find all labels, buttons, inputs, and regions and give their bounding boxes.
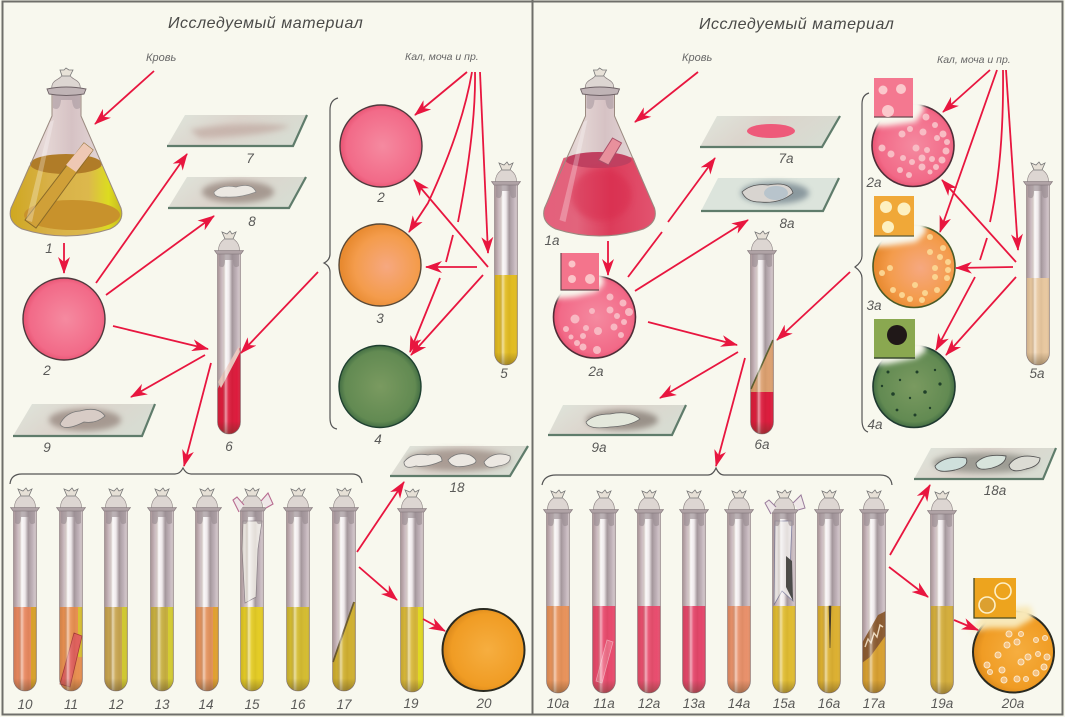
tube 15a: 15а (773, 696, 796, 711)
arrow: plate a to slide 7a, upper part (668, 158, 715, 222)
tube 16a: 16а (818, 696, 841, 711)
arrow: blood to flask (95, 71, 154, 124)
plate 20a with inset: 20а (1001, 696, 1025, 711)
arrow: plate a to slide 8a (635, 220, 748, 291)
slide 8a (701, 178, 839, 231)
arrow: plate a toward slide 7a, lower part (628, 232, 662, 277)
plate 20: yellow: 20 (475, 696, 492, 711)
label: 1а (544, 233, 560, 248)
arrow: material to plate 3a (940, 70, 997, 232)
tube 12a (634, 490, 664, 711)
plate 2: upper (340, 105, 422, 205)
slide 8: 8 (248, 214, 256, 229)
tube 16a (814, 490, 844, 711)
tube 14 (192, 488, 222, 712)
slide 7a: 7а (778, 151, 794, 166)
tube 16: 16 (290, 697, 306, 712)
arrow: material to tube 5a (1006, 70, 1018, 250)
tube 17: 17 (336, 697, 352, 712)
tube 6a: 6а (754, 437, 770, 452)
arrow: tube 5a to plate 2a (942, 180, 1016, 262)
slide 18 (390, 446, 528, 495)
plate 3a with inset (866, 196, 955, 313)
tube 19: 19 (403, 696, 419, 711)
plate 4a with inset: 4а (867, 417, 883, 432)
tube 6: 6 (225, 439, 233, 454)
tube 13a (680, 490, 708, 711)
label: 1 (45, 241, 53, 256)
plate 3: orange (339, 224, 421, 326)
slide 7: 7 (246, 151, 254, 166)
tube 11a (590, 490, 618, 711)
arrow: material to plate 4, middle part (446, 235, 453, 262)
tube 10 (10, 488, 40, 712)
plate 3: orange: 3 (376, 311, 384, 326)
slide 18: 18 (449, 480, 465, 495)
tube 17a: 17а (863, 696, 886, 711)
tube 5a: 5а (1029, 366, 1045, 381)
tube 5: 5 (500, 366, 508, 381)
arrow: tube 19a to plate 20a (954, 620, 978, 630)
plate 2: pink agar: 2 (42, 363, 51, 378)
plate 2a with inset (550, 253, 636, 379)
liquid (10, 166, 122, 236)
title: right: Исследуемый материал (699, 16, 894, 33)
slide 9: 9 (43, 440, 51, 455)
slide 8 (168, 177, 306, 229)
tube 13 (148, 488, 176, 712)
arrow: tube 19 to plate 20 (423, 619, 445, 631)
arrow: flask a to plate (607, 241, 609, 275)
plate 4: green (339, 346, 421, 447)
tube 5a (1024, 162, 1052, 381)
plate 2a with inset: 2а (587, 364, 604, 379)
label: blood: Кровь (682, 52, 712, 64)
arrow: plate to slide 8 (106, 216, 214, 295)
tube 16 (284, 488, 312, 712)
tube 10a: 10а (547, 696, 570, 711)
arrow: tube 17 to tube 19 (359, 567, 397, 600)
slide 9 (13, 404, 155, 455)
arrow: tube 5 to plate 2 (414, 180, 488, 267)
plate 2: upper: 2 (376, 190, 385, 205)
plate 4: green: 4 (374, 432, 382, 447)
slide 9a (548, 405, 686, 455)
tube 17 (330, 488, 358, 712)
panel: left, negative result (10, 15, 528, 712)
plate 20a with inset (970, 578, 1054, 711)
arrow: tube 5a to plate 4a (946, 277, 1016, 355)
tube 13a: 13а (683, 696, 706, 711)
panel: right, positive result (542, 16, 1056, 711)
title: left: Исследуемый материал (168, 15, 363, 32)
label: faeces, urine: Кал, моча и пр. (937, 54, 1011, 66)
brace: tube row (10, 468, 362, 484)
arrow: flask to plate (63, 243, 65, 273)
liquid (544, 153, 655, 236)
plate 20: yellow (442, 609, 524, 711)
tube 15a (765, 490, 805, 711)
arrow: material to plate 3 (409, 72, 472, 232)
arrow: tube 17a to tube 19a (889, 567, 928, 597)
arrow: tube 6 to slide 9 (131, 355, 205, 397)
arrow: material to plate 2a (943, 70, 990, 112)
tube 6a (748, 231, 776, 452)
tube 19 (398, 489, 426, 711)
tube 11a: 11а (593, 696, 615, 711)
tube 14a: 14а (728, 696, 751, 711)
tube 15: 15 (244, 697, 260, 712)
tube 19a (928, 491, 956, 711)
arrow: plates to tube 6a (777, 272, 850, 340)
arrow: material to tube 5 (480, 72, 488, 253)
slide 8a: 8а (779, 216, 795, 231)
arrow: blood to flask a (635, 72, 698, 122)
plate 2: pink agar (23, 278, 105, 378)
tube 14: 14 (198, 697, 214, 712)
plate 4a with inset (867, 319, 955, 432)
arrow: plates to tube 6 (241, 272, 318, 353)
arrow: tube 6a to slide 9a (660, 352, 738, 398)
arrow: material to plate 4a, upper part (990, 70, 1003, 222)
arrow: plate a to tube 6a (648, 322, 737, 345)
tube 15 (233, 488, 273, 712)
tube 13: 13 (154, 697, 170, 712)
brace: group 2a-4a (855, 93, 869, 432)
plate 2a upper with inset (865, 78, 954, 190)
brace: group 2-4 (324, 98, 338, 429)
slide 18a (914, 448, 1056, 498)
arrow: tube 6a to tube row (716, 358, 745, 466)
arrow: plate to slide 7 (96, 154, 187, 283)
tube 11 (56, 488, 86, 712)
tube 14a (724, 490, 754, 711)
label: blood: Кровь (146, 52, 176, 64)
tube 5 (492, 162, 520, 381)
tube 12: 12 (108, 697, 124, 712)
tube 6 (214, 231, 244, 454)
slide 7 (167, 115, 307, 166)
tube 11: 11 (64, 697, 78, 712)
label: faeces, urine: Кал, моча и пр. (405, 51, 479, 63)
arrow: material to plate 4, upper part (458, 72, 475, 222)
arrow: tube 17a to slide 18a (890, 485, 930, 555)
brace: tube row a (542, 468, 892, 485)
tube 12a: 12а (638, 696, 661, 711)
arrow: tube 5 to plate 3 (426, 266, 477, 268)
arrow: material to plate 4a, middle part (980, 238, 987, 260)
tube 17a (860, 490, 888, 711)
arrow: tube 5 to plate 4 (411, 275, 483, 355)
flask 1a (544, 68, 655, 248)
arrow: plate to tube 6 (113, 326, 208, 349)
tube 12 (102, 488, 130, 712)
arrow: material to plate 2 (415, 72, 467, 115)
arrow: material to plate 4a, lower part (936, 277, 975, 350)
arrow: tube 5a to plate 3a (956, 267, 1013, 268)
arrow: tube 6 to tube row (184, 363, 211, 466)
slide 9a: 9а (591, 440, 607, 455)
tube 10a (544, 490, 572, 711)
arrow: material to plate 4, lower part (410, 278, 440, 352)
plate 2a upper with inset: 2а (865, 175, 882, 190)
arrow: tube 17 to slide 18 (357, 482, 404, 552)
tube 10: 10 (17, 697, 33, 712)
tube 19a: 19а (931, 696, 954, 711)
plate 3a with inset: 3а (866, 298, 882, 313)
slide 7a (700, 116, 840, 166)
flask 1 (10, 68, 122, 256)
slide 18a: 18а (984, 483, 1007, 498)
